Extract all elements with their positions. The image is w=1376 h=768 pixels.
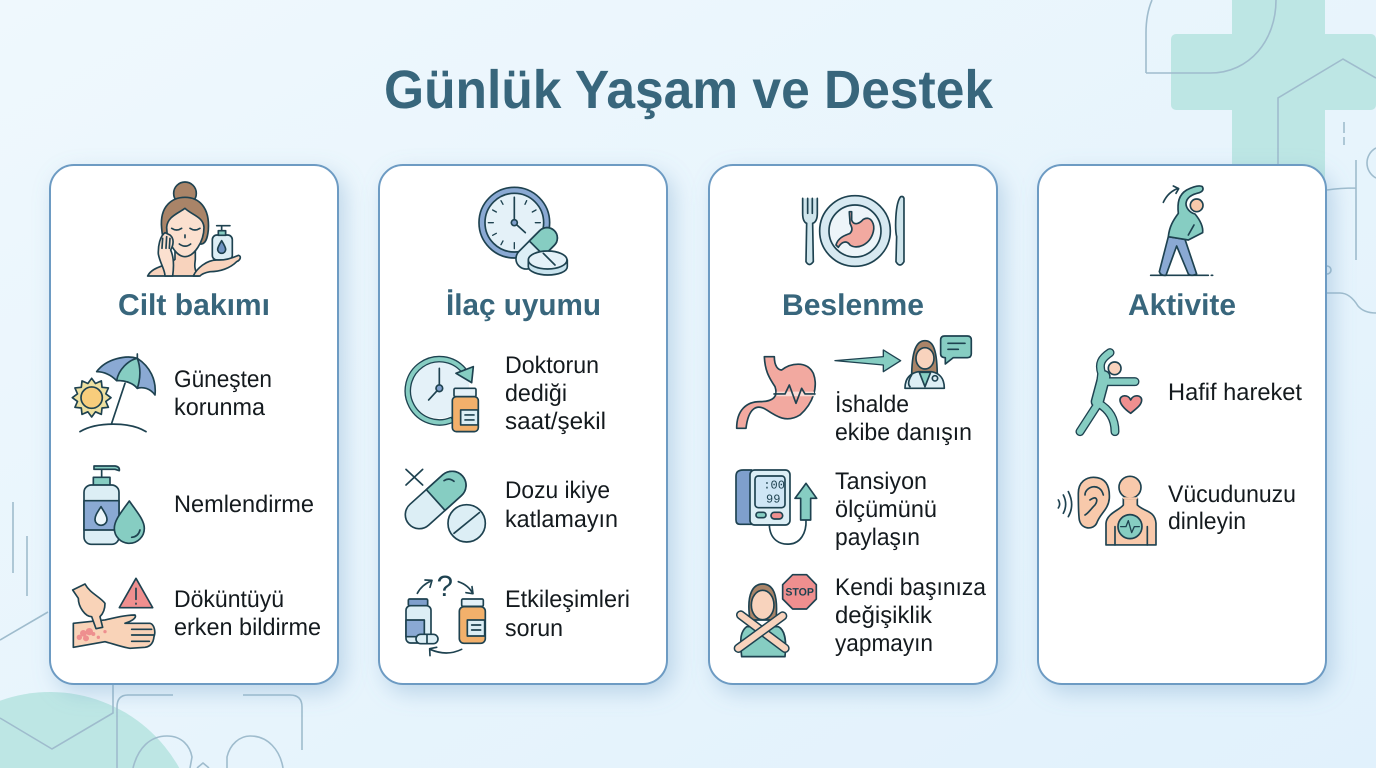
text: Kendi başınıza değişiklik yapmayın: değişiklik <box>835 602 933 629</box>
panel: Beslenme <box>709 165 997 684</box>
heading: Beslenme: Beslenme <box>782 289 924 322</box>
text: Doktorun dediği saat/şekil: saat/şekil <box>505 408 606 435</box>
icon: woman with crossed arms and stop sign <box>738 575 816 657</box>
text: Döküntüyü erken bildirme: Döküntüyü <box>174 586 284 613</box>
text: Kendi başınıza değişiklik yapmayın <box>835 574 987 657</box>
text: Etkileşimleri sorun <box>505 586 630 642</box>
card: İlaç uyumu <box>379 165 667 684</box>
icon: woman with lotion <box>148 182 240 276</box>
text: Vücudunuzu dinleyin: dinleyin <box>1168 508 1246 535</box>
text: Tansiyon ölçümünü paylaşın <box>835 468 937 551</box>
text: Döküntüyü erken bildirme <box>174 586 321 641</box>
text: Tansiyon ölçümünü paylaşın: ölçümünü <box>835 496 937 523</box>
icon: arrow to doctor with speech bubble <box>835 336 971 388</box>
text: İshalde ekibe danışın <box>835 391 972 446</box>
text: Vücudunuzu dinleyin: Vücudunuzu <box>1168 481 1296 508</box>
icon: ear and body with pulse <box>1058 476 1156 545</box>
icon: blood pressure monitor: 99 <box>766 493 780 506</box>
icon: side stretching person <box>1151 186 1213 275</box>
text: Etkileşimleri sorun: sorun <box>505 615 563 642</box>
icon: capsule and tablet crossed <box>400 466 485 542</box>
icon: blood pressure monitor <box>736 470 817 544</box>
card: Cilt bakımı <box>50 165 338 684</box>
heading: İlaç uyumu: İlaç uyumu <box>446 289 601 322</box>
icon: sun and umbrella <box>72 354 155 432</box>
text: Doktorun dediği saat/şekil: dediği <box>505 380 567 407</box>
panel: Aktivite <box>1038 165 1326 684</box>
panel: Cilt bakımı <box>50 165 338 684</box>
text: Vücudunuzu dinleyin <box>1168 481 1296 535</box>
icon: moving figure with heart <box>1080 353 1142 432</box>
icon: clock and pills <box>479 187 567 275</box>
text: Kendi başınıza değişiklik yapmayın: yapmayın <box>835 630 933 657</box>
title: Günlük Yaşam ve Destek <box>384 60 994 120</box>
text: Tansiyon ölçümünü paylaşın: Tansiyon <box>835 468 927 495</box>
icon: clock with arrow and bottle <box>408 358 478 432</box>
text: Doktorun dediği saat/şekil <box>505 352 606 435</box>
panel: İlaç uyumu <box>379 165 667 684</box>
text: Tansiyon ölçümünü paylaşın: paylaşın <box>835 524 920 551</box>
icon: blood pressure monitor: :00 <box>763 479 785 492</box>
text: Döküntüyü erken bildirme: erken bildirme <box>174 614 321 641</box>
text: Etkileşimleri sorun: Etkileşimleri <box>505 586 630 613</box>
text: Güneşten korunma: Güneşten <box>174 366 272 393</box>
text: Doktorun dediği saat/şekil: Doktorun <box>505 352 599 379</box>
icon: plate with stomach, fork and knife <box>803 196 904 266</box>
text: Dozu ikiye katlamayın <box>505 477 618 533</box>
text: Nemlendirme: Nemlendirme <box>174 491 314 518</box>
icon: woman with crossed arms and stop sign: STOP <box>785 586 814 598</box>
heading: Aktivite: Aktivite <box>1128 289 1236 322</box>
icon: drug interaction cycle <box>406 569 485 656</box>
text: Kendi başınıza değişiklik yapmayın: Kendi başınıza <box>835 574 987 601</box>
icon: drug interaction cycle: ? <box>437 569 453 602</box>
text: Hafif hareket: Hafif hareket <box>1168 379 1302 406</box>
icon: rash on arm with warning <box>73 578 155 648</box>
icon: lotion bottle and drop <box>84 466 144 544</box>
card: Beslenme <box>709 165 997 684</box>
text: Dozu ikiye katlamayın: Dozu ikiye <box>505 477 610 504</box>
text: Dozu ikiye katlamayın: katlamayın <box>505 506 618 533</box>
heading: Cilt bakımı: Cilt bakımı <box>118 289 270 322</box>
text: Güneşten korunma: korunma <box>174 394 266 421</box>
text: İshalde ekibe danışın: ekibe danışın <box>835 419 972 446</box>
text: Güneşten korunma <box>174 366 272 421</box>
card: Aktivite <box>1038 165 1326 684</box>
text: İshalde ekibe danışın: İshalde <box>835 391 909 418</box>
icon: stomach with pulse <box>737 357 815 428</box>
